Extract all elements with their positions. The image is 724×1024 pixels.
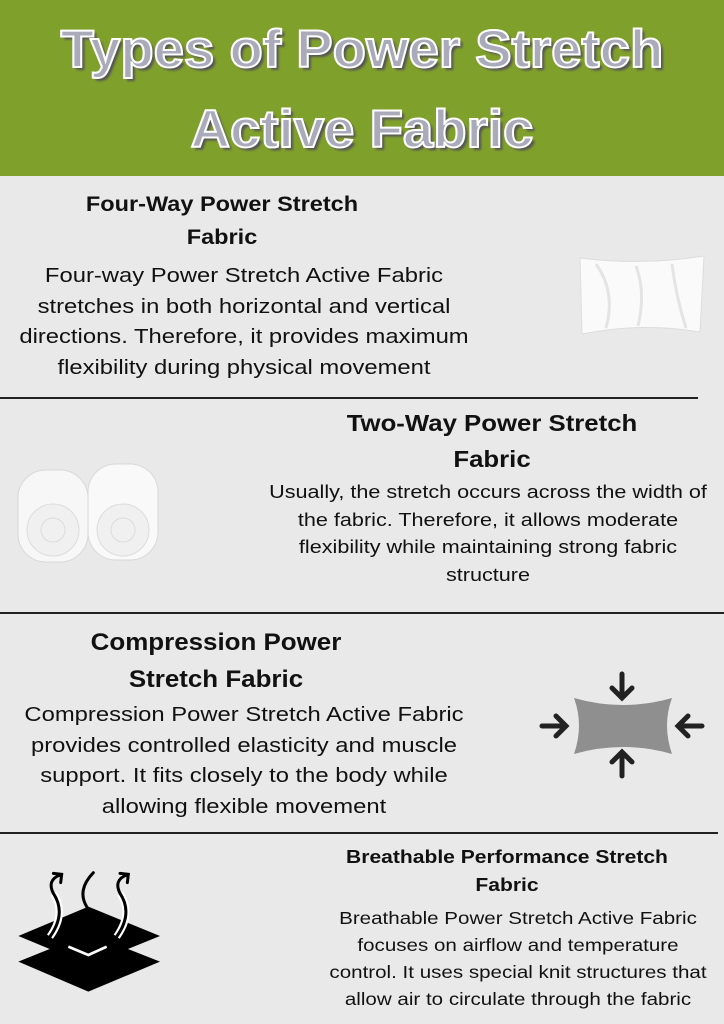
section 2 text: Usually, the stretch occurs across the width of [269,482,707,502]
section 4 text: focuses on airflow and temperature [357,935,679,955]
section 3 heading: Compression Power [91,629,341,656]
section 4 heading: Breathable Performance Stretch [346,847,668,867]
section 4 text: allow air to circulate through the fabric [345,989,691,1009]
section 2 text [269,482,707,584]
section 3 text: Compression Power Stretch Active Fabric [24,704,464,726]
section 4 text: control. It uses special knit structures that [329,962,707,982]
section 1 text [19,265,469,378]
icon: breathable layers [18,871,160,992]
section 2 text: structure [446,564,530,584]
icon: rolled towels [18,464,158,562]
section 1 heading: Fabric [187,226,257,249]
section 2 heading: Fabric [453,446,531,472]
section 1 heading [86,193,358,249]
section 3 text: allowing flexible movement [102,796,386,818]
section 2 text: flexibility while maintaining strong fabric [299,537,677,557]
section 1 heading: Four-Way Power Stretch [86,193,358,216]
section 4 text: Breathable Power Stretch Active Fabric [339,908,697,928]
section 4 text [329,908,707,1009]
icon: white fabric [580,256,704,334]
title: Active Fabric [191,100,533,159]
section 1 text: Four-way Power Stretch Active Fabric [45,265,443,287]
icon: compression arrows [540,672,704,778]
section 1 text: stretches in both horizontal and vertical [38,296,450,318]
section 3 heading [91,629,341,693]
section 3 text [24,704,464,818]
header banner [0,0,724,176]
section 3 heading: Stretch Fabric [129,666,303,693]
section 1 text: flexibility during physical movement [57,356,431,378]
section 4 heading [346,847,668,895]
title [60,20,664,159]
title: Types of Power Stretch [61,20,663,79]
section 2 text: the fabric. Therefore, it allows moderate [298,510,678,530]
section 4 heading: Fabric [475,875,539,895]
section 2 heading [347,410,637,472]
section 3 text: provides controlled elasticity and muscle [31,734,457,756]
section 3 text: support. It fits closely to the body while [40,765,448,787]
section 2 heading: Two-Way Power Stretch [347,410,637,436]
section 1 text: directions. Therefore, it provides maximum [19,326,469,348]
